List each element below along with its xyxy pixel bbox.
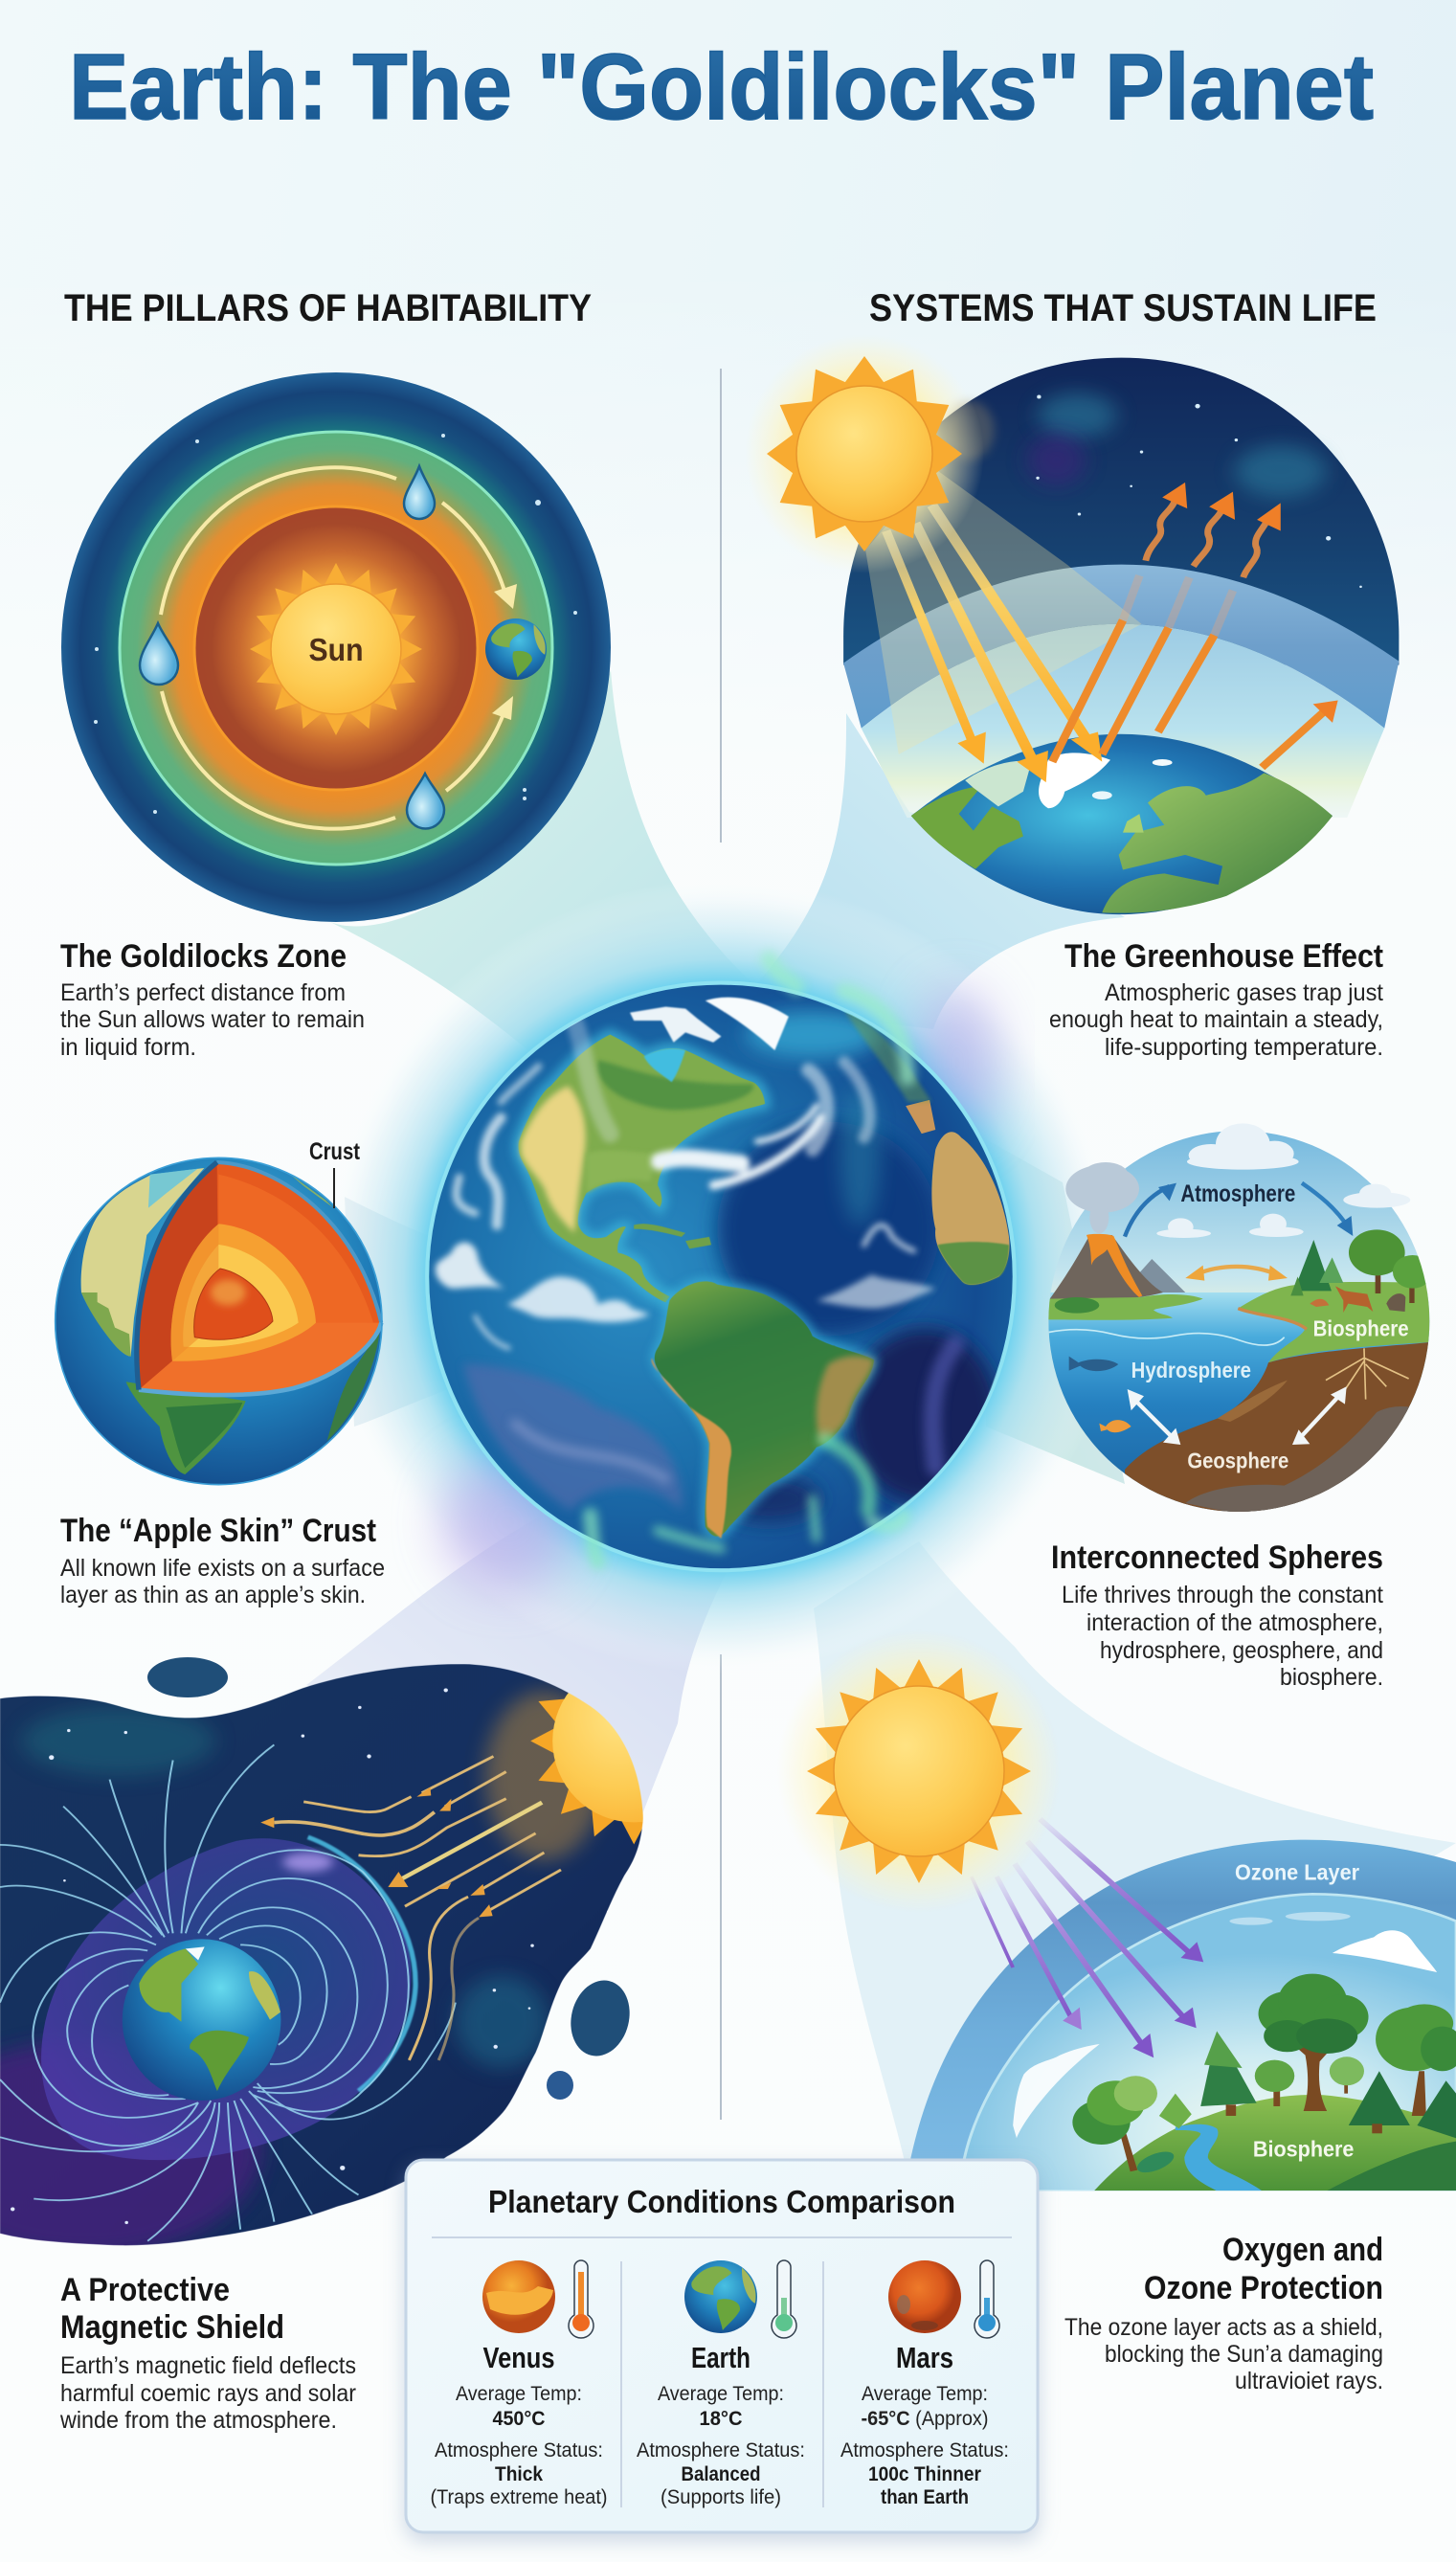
panel: interconnected spheres — [1045, 1123, 1434, 1691]
sphere labels — [1131, 1180, 1409, 1472]
icon: earth on orbit — [485, 618, 547, 680]
label: crust: Crust — [309, 1138, 361, 1165]
arrows between spheres — [1125, 1183, 1353, 1445]
column: venus: Thick — [495, 2463, 543, 2485]
magnetosphere — [41, 1838, 411, 2160]
column: earth: Balanced — [682, 2463, 760, 2485]
panel: greenhouse effect — [745, 334, 1399, 1061]
text: apple skin crust: The “Apple Skin” Crust — [60, 1513, 376, 1549]
panel: planetary conditions comparison — [406, 2160, 1038, 2532]
sphere labels: Biosphere — [1313, 1316, 1409, 1341]
icon: water drops — [140, 466, 444, 829]
panel: apple skin crust — [56, 1138, 386, 1608]
column: earth: Average Temp: — [658, 2383, 784, 2405]
panel: goldilocks zone — [60, 372, 611, 1061]
column: venus: 450°C — [492, 2408, 546, 2430]
arrows: reflected heat — [1052, 483, 1338, 768]
heading: systems that sustain life: SYSTEMS THAT SUSTAIN LIFE — [869, 287, 1377, 329]
text: ozone protection: The ozone layer acts as a shield, — [1064, 2314, 1383, 2341]
space scene — [0, 1664, 643, 2246]
icon: thermometer mild — [772, 2260, 796, 2338]
icon: earth — [684, 2260, 757, 2333]
column: venus: Venus — [482, 2341, 555, 2374]
field lines — [0, 1744, 456, 2241]
card heading: Planetary Conditions Comparison — [488, 2184, 955, 2219]
text: the goldilocks zone: the Sun allows water to remain — [60, 1006, 365, 1033]
ozone illustration: Biosphere — [1253, 2138, 1354, 2162]
spheres illustration — [1045, 1123, 1434, 1517]
core layers — [140, 1162, 379, 1393]
fish — [1069, 1357, 1131, 1432]
column: mars: than Earth — [881, 2486, 969, 2508]
text: magnetic shield: Magnetic Shield — [60, 2309, 284, 2346]
column: mars: -65°C (Approx) — [862, 2408, 988, 2430]
panel: ozone protection — [777, 1629, 1456, 2394]
greenhouse illustration — [843, 358, 1399, 914]
text: ozone protection: blocking the Sun’a damaging — [1105, 2341, 1383, 2368]
text: ozone protection: Ozone Protection — [1144, 2270, 1383, 2306]
text: magnetic shield: harmful coemic rays and solar — [60, 2380, 356, 2407]
icon: mars — [888, 2260, 961, 2333]
orbit arrows — [161, 467, 507, 829]
goldilocks illustration — [61, 372, 611, 922]
column: venus: Atmosphere Status: — [435, 2439, 603, 2461]
column: earth: Atmosphere Status: — [637, 2439, 805, 2461]
trees and animals — [1290, 1229, 1432, 1313]
column: venus: Average Temp: — [456, 2383, 582, 2405]
continents — [519, 1011, 1010, 1539]
polar ice — [630, 998, 789, 1050]
text: the goldilocks zone — [60, 938, 365, 1061]
text: interconnected spheres: Life thrives through the constant — [1062, 1582, 1383, 1608]
column: venus: (Traps extreme heat) — [431, 2486, 607, 2508]
text: magnetic shield: A Protective — [60, 2272, 230, 2308]
text: magnetic shield: winde from the atmosphere. — [59, 2407, 337, 2434]
text: the greenhouse effect: enough heat to maintain a steady, — [1049, 1006, 1383, 1033]
column: mars: Average Temp: — [862, 2383, 988, 2405]
text: the goldilocks zone: Earth’s perfect distance from — [60, 979, 346, 1006]
sphere labels: Geosphere — [1187, 1448, 1288, 1472]
text: ozone protection: ultravioiet rays. — [1235, 2368, 1383, 2394]
central Earth — [324, 879, 1118, 1674]
sun — [530, 1693, 643, 1844]
sphere labels: Atmosphere — [1180, 1180, 1295, 1207]
earth — [123, 1939, 280, 2101]
column: earth — [637, 2260, 805, 2508]
clouds — [436, 1243, 935, 1322]
light beams connecting panels to the central Earth — [306, 670, 1456, 2173]
text: interconnected spheres: interaction of the atmosphere, — [1086, 1609, 1383, 1636]
text: magnetic shield — [59, 2272, 356, 2434]
icon: sun — [745, 334, 984, 573]
text: interconnected spheres: hydrosphere, geosphere, and — [1100, 1637, 1383, 1664]
cutaway illustration — [56, 1157, 386, 1485]
icon: thermometer hot — [569, 2260, 594, 2338]
labels: Ozone Layer — [1235, 1860, 1359, 1885]
icon: thermometer cold — [974, 2260, 999, 2338]
clouds and smoke — [1065, 1123, 1410, 1238]
text: the goldilocks zone: The Goldilocks Zone — [60, 938, 347, 975]
UV rays — [972, 1819, 1203, 2057]
panel: magnetic shield — [0, 1637, 737, 2434]
column: mars: 100c Thinner — [868, 2463, 981, 2485]
solar wind arrows — [274, 1756, 561, 2060]
column: earth: (Supports life) — [661, 2486, 781, 2508]
arrows: incoming sunlight — [886, 505, 1102, 782]
icon: sun: Sun — [308, 632, 364, 667]
sphere labels: Hydrosphere — [1131, 1358, 1251, 1382]
label: crust — [309, 1138, 361, 1208]
satellite blobs — [147, 1657, 638, 2100]
icon: venus — [482, 2260, 555, 2333]
icon: sun — [250, 563, 422, 735]
aurora wisps — [591, 959, 907, 1562]
column: mars — [840, 2260, 1009, 2508]
text: interconnected spheres: Interconnected Spheres — [1051, 1539, 1383, 1576]
text: the greenhouse effect: life-supporting temperature. — [1105, 1034, 1383, 1061]
title: Earth: The "Goldilocks" Planet — [69, 34, 1374, 139]
column: mars: Atmosphere Status: — [840, 2439, 1009, 2461]
text: apple skin crust: layer as thin as an apple’s skin. — [60, 1582, 366, 1608]
text: the greenhouse effect — [1049, 938, 1383, 1061]
text: ozone protection — [1064, 2232, 1383, 2394]
heading: the pillars of habitability: THE PILLARS OF HABITABILITY — [64, 287, 592, 329]
text: apple skin crust — [60, 1513, 385, 1608]
text: apple skin crust: All known life exists on a surface — [60, 1555, 385, 1582]
column: mars: Mars — [896, 2341, 953, 2374]
text: interconnected spheres: biosphere. — [1280, 1664, 1383, 1691]
column: earth: Earth — [691, 2341, 750, 2374]
text: the greenhouse effect: Atmospheric gases trap just — [1105, 979, 1383, 1006]
text: interconnected spheres — [1051, 1539, 1383, 1691]
text: the goldilocks zone: in liquid form. — [60, 1034, 196, 1061]
column: earth: 18°C — [699, 2408, 743, 2430]
trees — [1072, 1974, 1456, 2171]
ozone illustration — [905, 1819, 1456, 2191]
text: the greenhouse effect: The Greenhouse Effect — [1064, 938, 1383, 975]
text: ozone protection: Oxygen and — [1222, 2232, 1383, 2268]
text: magnetic shield: Earth’s magnetic field deflects — [60, 2352, 356, 2379]
column: venus — [431, 2260, 607, 2508]
icon: sun — [777, 1629, 1061, 1913]
